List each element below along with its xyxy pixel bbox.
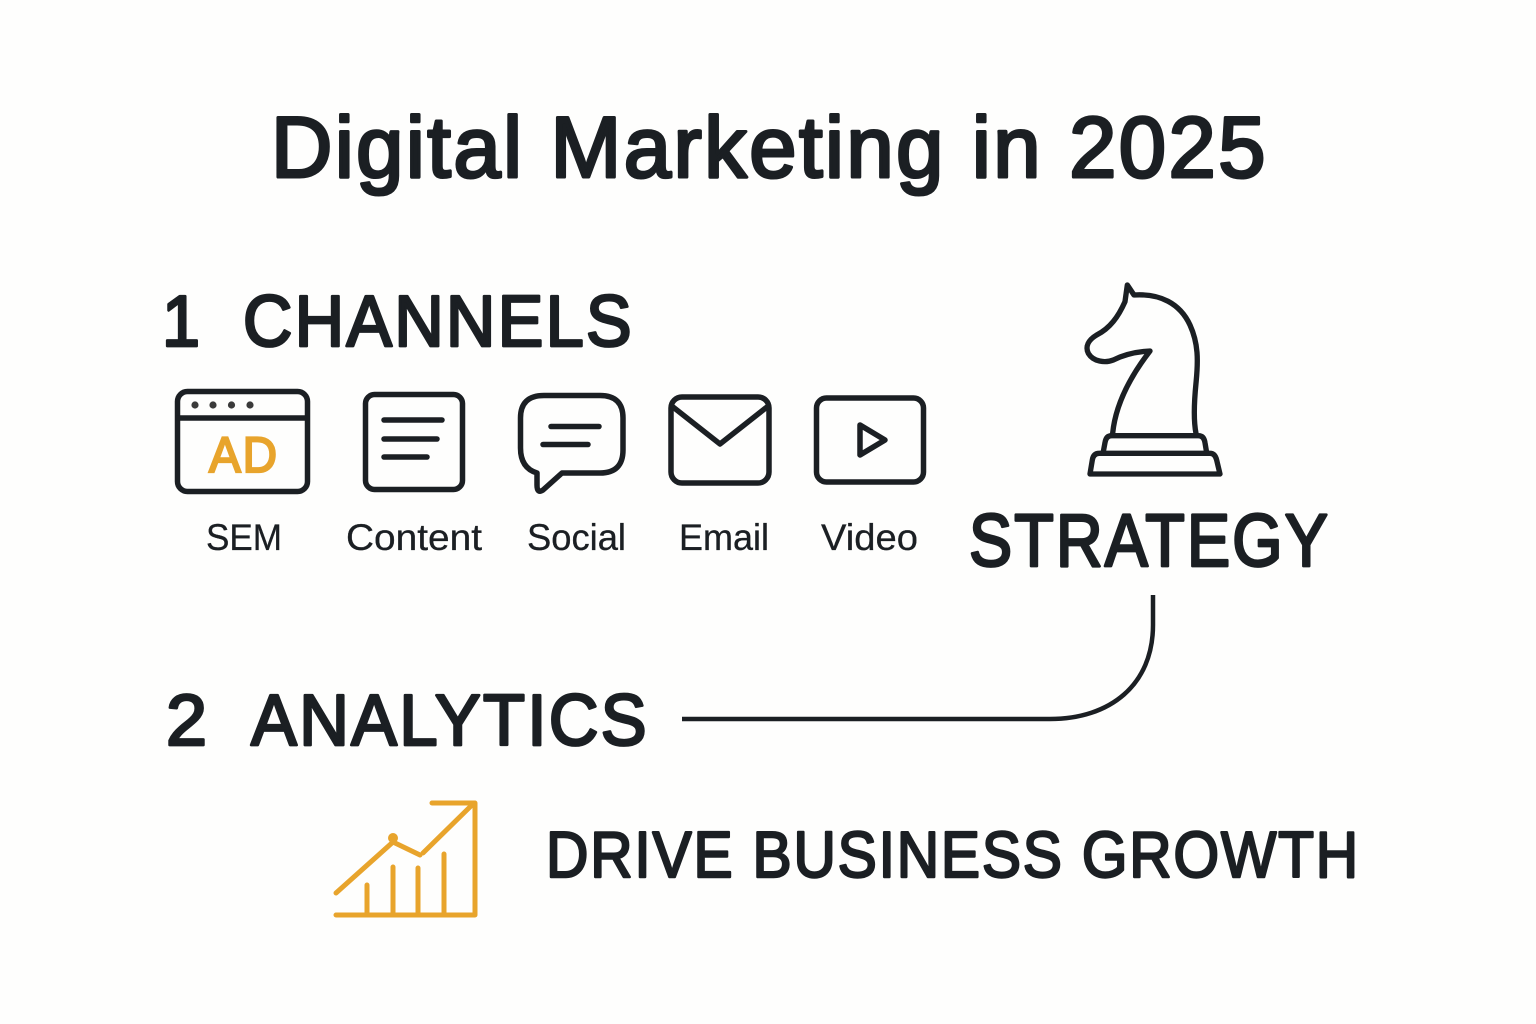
icon: growth chart [336, 803, 475, 915]
icon: SEM ad browser window: AD [209, 427, 279, 483]
icon: video player [816, 398, 924, 482]
icon: content document [366, 394, 462, 490]
strategy group [969, 285, 1330, 582]
heading: 2 analytics: ANALYTICS [251, 681, 649, 761]
label: Content: Content [346, 517, 483, 558]
icon: email envelope [671, 397, 769, 483]
icon: social speech bubble [520, 396, 623, 491]
icon: SEM ad browser window [178, 392, 308, 492]
label: Social: Social [527, 517, 626, 558]
label: SEM: SEM [206, 517, 282, 558]
arrow: connector from strategy to analytics [682, 595, 1153, 719]
heading: strategy: STRATEGY [969, 499, 1330, 582]
title: Digital Marketing in 2025 [271, 100, 1268, 196]
label: Video: Video [821, 517, 918, 558]
heading: 2 analytics: 2 [166, 681, 207, 761]
heading: 1 channels: 1 [162, 282, 200, 362]
label: Email: Email [679, 517, 769, 558]
heading: 1 channels: CHANNELS [243, 282, 634, 362]
section 1: channels [162, 282, 924, 558]
text: drive business growth: DRIVE BUSINESS GROWTH [546, 818, 1360, 891]
icon: chess knight [1087, 285, 1220, 474]
